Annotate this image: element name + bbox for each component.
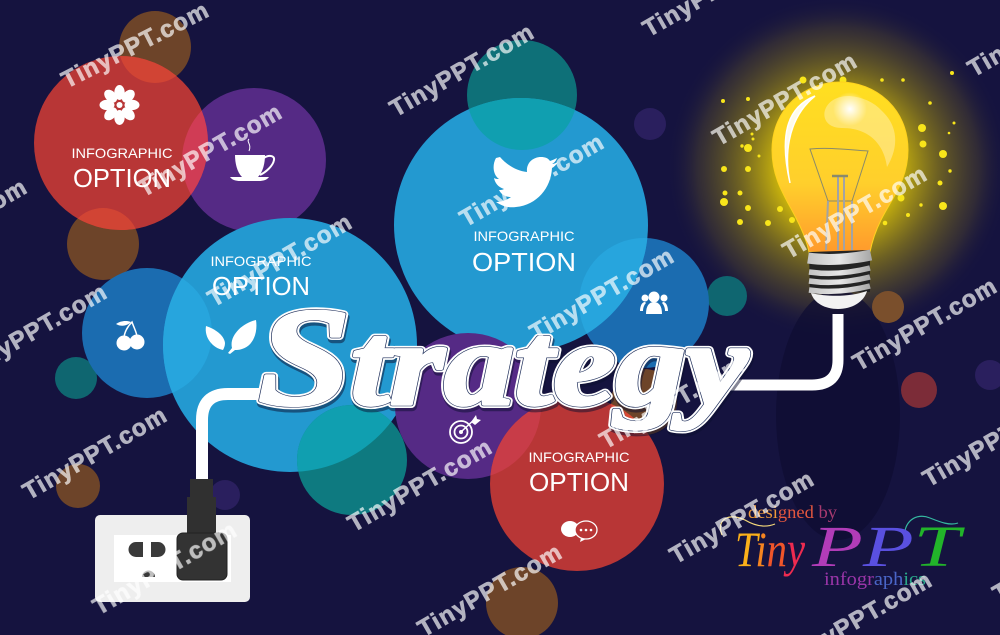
watermarks: TinyPPT.com bbox=[778, 160, 932, 265]
overlap highlights bbox=[78, 56, 208, 230]
panel: main blue leaf circle bbox=[163, 218, 417, 472]
light bulb bbox=[720, 71, 956, 309]
watermarks: TinyPPT.com bbox=[343, 433, 497, 538]
title: Strategy lettering: Strategy bbox=[259, 283, 750, 438]
label: infographic option: INFOGRAPHIC bbox=[72, 145, 172, 161]
icon: leaves bbox=[206, 320, 256, 354]
plug body bbox=[177, 533, 227, 580]
cable: right to bulb bbox=[730, 314, 838, 385]
logo: designed by TinyPPT infographics: infographics bbox=[824, 569, 926, 590]
label: infographic option bbox=[528, 449, 630, 497]
title: Strategy lettering: Strategy bbox=[258, 280, 749, 435]
thread bands bbox=[808, 255, 871, 291]
title: Strategy lettering: Strategy bbox=[258, 280, 749, 435]
watermarks: TinyPPT.com bbox=[455, 128, 609, 233]
logo: designed by TinyPPT infographics bbox=[720, 502, 965, 590]
icon: chat bubbles bbox=[561, 521, 597, 542]
panel: large blue twitter circle bbox=[394, 98, 648, 350]
bulb glow bbox=[666, 0, 1000, 340]
logo: designed by TinyPPT infographics: P P T bbox=[811, 514, 965, 579]
logo swashes bbox=[720, 516, 958, 540]
panel: red chat circle bbox=[490, 401, 664, 571]
label: infographic option: OPTION bbox=[212, 271, 310, 301]
socket holes bbox=[129, 542, 166, 577]
watermarks: TinyPPT.com bbox=[88, 516, 242, 621]
sparkles bbox=[720, 71, 956, 226]
panel: red flower circle bbox=[34, 56, 208, 230]
label: infographic option: INFOGRAPHIC bbox=[210, 253, 312, 269]
dark oval below bulb bbox=[776, 290, 900, 540]
logo: designed by TinyPPT infographics: Tiny bbox=[735, 521, 806, 577]
panel: purple coffee circle bbox=[182, 88, 326, 232]
label: infographic option: INFOGRAPHIC bbox=[528, 449, 630, 465]
label: infographic option: INFOGRAPHIC bbox=[474, 228, 574, 244]
watermarks: TinyPPT.com bbox=[595, 350, 749, 455]
label: infographic option: OPTION bbox=[529, 467, 629, 497]
watermarks: TinyPPT.com bbox=[665, 465, 819, 570]
wall socket bbox=[95, 479, 250, 602]
watermarks: TinyPPT.com bbox=[18, 401, 172, 506]
cable bulb-end highlight bbox=[832, 314, 844, 345]
screw base bbox=[809, 250, 870, 292]
icon: twitter bird bbox=[494, 157, 558, 207]
watermarks: TinyPPT.com bbox=[133, 98, 287, 203]
base tip bbox=[811, 291, 867, 309]
label: infographic option: OPTION bbox=[472, 247, 576, 277]
icon: cherries bbox=[116, 321, 144, 350]
panel: purple target circle bbox=[395, 333, 541, 479]
panel: blue right people circle bbox=[579, 238, 709, 368]
overlap highlights bbox=[490, 404, 648, 476]
glass highlights bbox=[824, 96, 895, 167]
filament bbox=[810, 148, 868, 250]
watermarks: TinyPPT.com bbox=[848, 272, 1000, 377]
label: infographic option: OPTION bbox=[73, 163, 171, 193]
label: infographic option bbox=[72, 145, 172, 193]
title: Strategy lettering: Strategy bbox=[258, 280, 749, 435]
plug neck bbox=[187, 479, 216, 534]
overlap highlights bbox=[163, 278, 212, 393]
overlap highlights bbox=[469, 98, 648, 334]
panel: teal lower circle bbox=[297, 405, 407, 515]
label: infographic option bbox=[210, 253, 312, 301]
watermarks: TinyPPT.com bbox=[708, 47, 862, 152]
panel: dark blue cherry circle bbox=[82, 268, 212, 398]
label: infographic option bbox=[472, 228, 576, 277]
icon: coffee cup bbox=[230, 139, 274, 181]
watermarks: TinyPPT.com bbox=[203, 208, 357, 313]
watermarks: TinyPPT.com bbox=[385, 18, 539, 123]
icon: target bbox=[450, 415, 481, 443]
icon: flower bbox=[100, 85, 140, 125]
cable: left to plug bbox=[202, 394, 276, 490]
logo: designed by TinyPPT infographics: designed by bbox=[748, 502, 837, 522]
panel: teal top circle bbox=[467, 40, 577, 150]
icon: people bbox=[640, 292, 668, 314]
watermarks: TinyPPT.com bbox=[525, 242, 679, 347]
bulb glass bbox=[772, 82, 908, 252]
